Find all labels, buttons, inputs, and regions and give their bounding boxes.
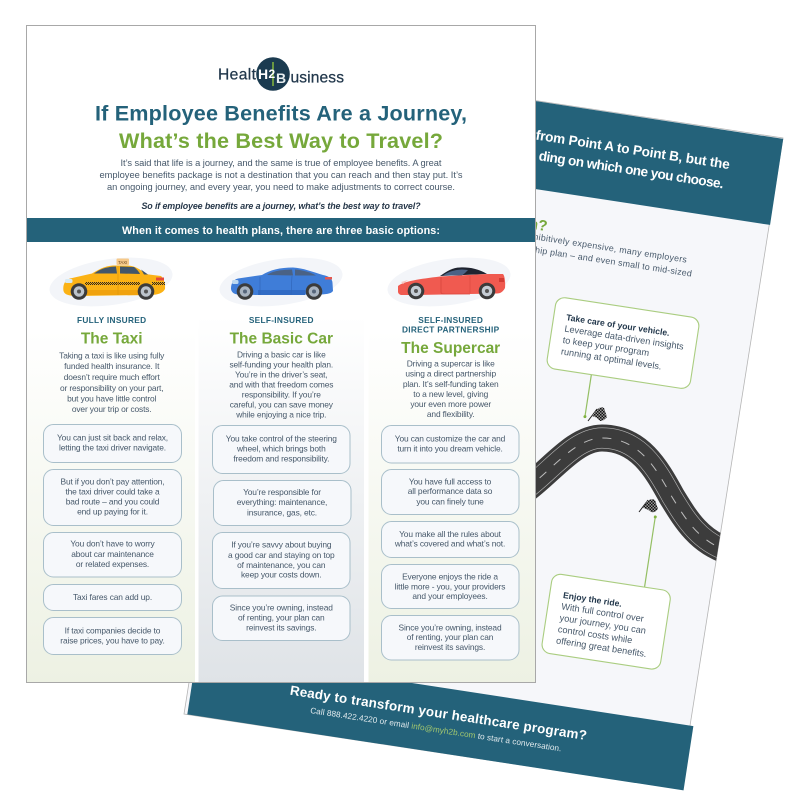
point card: [44, 424, 182, 462]
point card: keep your costs down.: [241, 570, 322, 580]
point card: turn it into you dream vehicle.: [397, 444, 503, 454]
panel: the taxi: [27, 251, 195, 682]
plan label: SELF-INSURED: [418, 315, 483, 325]
point card: a good car and staying on top: [228, 550, 335, 560]
logo: B: [276, 70, 286, 86]
point card: letting the taxi driver navigate.: [59, 443, 166, 453]
plan description: You’re in the driver’s seat,: [235, 370, 328, 380]
intro text: [100, 158, 463, 192]
plan description: plan. It’s self-funding taken: [403, 379, 499, 389]
callout: enjoy the ride: Enjoy the ride.: [562, 590, 623, 609]
plan description: careful, you can save money: [230, 400, 334, 410]
point card: You don’t have to worry: [70, 539, 156, 549]
point card: of renting, your plan can: [407, 632, 494, 642]
callout: take care of your vehicle: running at optimal levels.: [560, 346, 662, 372]
plan name: The Taxi: [81, 330, 143, 348]
logo: Healt: [218, 66, 257, 84]
point card: Taxi fares can add up.: [73, 592, 152, 602]
point card: [44, 532, 182, 577]
point card: Since you’re owning, instead: [230, 602, 333, 612]
title: If Employee Benefits Are a Journey,: [95, 100, 467, 126]
plan description: Taking a taxi is like using fully: [59, 350, 165, 360]
point card: You’re responsible for: [243, 487, 321, 497]
plan name: The Supercar: [401, 340, 500, 357]
intro text: an ongoing journey, and every year, you need to make adjustments to correct course.: [107, 182, 455, 192]
plan description: or responsibility on your part,: [60, 383, 163, 393]
footer contact line: Call 888.422.4220 or email info@myh2b.com to start a conversation.: [310, 706, 562, 753]
point card: freedom and responsibility.: [233, 454, 329, 464]
plan description: over your trip or costs.: [72, 404, 152, 414]
callout: enjoy the ride: [541, 501, 682, 670]
point card: You take control of the steering: [226, 434, 337, 444]
point card: If taxi companies decide to: [65, 625, 161, 635]
section banner: When it comes to health plans, there are three basic options:: [122, 225, 440, 237]
footer heading: Ready to transform your healthcare program?: [289, 683, 588, 743]
plan name: The Basic Car: [230, 330, 333, 348]
point card: You can customize the car and: [395, 434, 506, 444]
logo: 2: [268, 67, 276, 81]
point card: [214, 480, 351, 526]
back section text: hibitively expensive, many employers: [533, 231, 688, 265]
front page sheet: [26, 26, 536, 682]
plan description: doesn’t require much effort: [64, 372, 160, 382]
icon: checkered flag 1: [588, 407, 607, 421]
title: What’s the Best Way to Travel?: [119, 128, 443, 153]
callout: enjoy the ride: your journey, you can: [559, 613, 647, 636]
point card: raise prices, you have to pay.: [60, 636, 165, 646]
point card: all performance data so: [408, 486, 493, 496]
logo: H: [258, 66, 268, 82]
plan label: FULLY INSURED: [77, 315, 146, 325]
plan label: [402, 315, 500, 334]
intro text: It’s said that life is a journey, and the same is true of employee benefits. A great: [120, 158, 442, 168]
icon: blue car: [216, 251, 346, 313]
plan description: and with that freedom comes: [229, 380, 333, 390]
plan label: DIRECT PARTNERSHIP: [402, 324, 500, 334]
back header band: [274, 63, 783, 225]
back section heading: n?: [528, 216, 549, 235]
callout: take care of your vehicle: [539, 296, 700, 433]
plan description: using a direct partnership: [405, 369, 496, 379]
point card: reinvest its savings.: [415, 642, 485, 652]
icon: red car: [384, 251, 514, 313]
intro text: employee benefits package is not a destination that you can reach and then stay put. It’s: [100, 170, 463, 180]
panel: the supercar: [368, 251, 535, 682]
point card: Since you’re owning, instead: [399, 622, 502, 632]
panel: back page: [184, 63, 783, 790]
icon: taxi: TAXI: [118, 260, 127, 265]
point card: [382, 564, 519, 608]
point card: But if you don’t pay attention,: [60, 476, 164, 486]
back footer band: [187, 650, 693, 790]
point card: [44, 470, 182, 526]
back page road: [525, 438, 728, 551]
logo: [218, 57, 344, 91]
point card: of renting, your plan can: [238, 613, 325, 623]
back header text: from Point A to Point B, but the: [535, 128, 731, 172]
icon: checkered flag 2: [639, 499, 658, 512]
callout: take care of your vehicle: to keep your program: [562, 335, 650, 358]
title: [95, 100, 467, 153]
point card: insurance, gas, etc.: [247, 507, 317, 517]
plan description: [59, 350, 165, 414]
point card: everything: maintenance,: [237, 497, 327, 507]
point card: end up paying for it.: [77, 507, 148, 517]
panel: front page: [26, 26, 536, 682]
point card: reinvest its savings.: [246, 622, 316, 632]
plan description: Driving a supercar is like: [407, 359, 495, 369]
point card: little more - you, your providers: [395, 581, 505, 591]
plan description: and flexibility.: [427, 409, 474, 419]
point card: and your employees.: [412, 591, 488, 601]
point card: you can finely tune: [416, 496, 484, 506]
point card: [382, 470, 519, 514]
point card: You make all the rules about: [399, 529, 502, 539]
plan label: SELF-INSURED: [249, 315, 314, 325]
plan description: while enjoying a nice trip.: [235, 410, 326, 420]
back header text: ding on which one you choose.: [538, 148, 725, 191]
point card: [212, 596, 350, 640]
callout: take care of your vehicle: Leverage data-driven insights: [564, 324, 685, 352]
plan description: to a new level, giving: [413, 389, 489, 399]
point card: [382, 426, 519, 463]
callout: enjoy the ride: With full control over: [561, 601, 645, 624]
intro question: So if employee benefits are a journey, what’s the best way to travel?: [142, 201, 421, 211]
callout: take care of your vehicle: Take care of your vehicle.: [566, 312, 670, 338]
plan description: [403, 359, 499, 419]
back page sheet: [184, 63, 783, 789]
point card: Everyone enjoys the ride a: [402, 571, 498, 581]
callout: enjoy the ride: offering great benefits.: [556, 635, 647, 659]
point card: [212, 532, 350, 588]
point card: [382, 616, 519, 660]
point card: of maintenance, you can: [237, 560, 326, 570]
point card: or related expenses.: [76, 559, 149, 569]
plan description: funded health insurance. It: [64, 361, 160, 371]
point card: about car maintenance: [71, 549, 154, 559]
plan description: but you have little control: [67, 394, 157, 404]
point card: what’s covered and what’s not.: [394, 539, 505, 549]
panel: the basic car: [198, 251, 364, 682]
icon: taxi: [46, 251, 176, 313]
point card: bad route – and you could: [66, 497, 160, 507]
plan description: self-funding your health plan.: [229, 360, 333, 370]
point card: wheel, which brings both: [236, 444, 326, 454]
plan description: your even more power: [410, 399, 491, 409]
logo: usiness: [290, 70, 344, 86]
plan description: [229, 350, 334, 420]
section banner: [27, 218, 535, 242]
point card: [382, 522, 519, 558]
point card: You have full access to: [409, 476, 492, 486]
point card: If you’re savvy about buying: [231, 539, 332, 549]
point card: the taxi driver could take a: [65, 487, 160, 497]
point card: [44, 584, 182, 610]
back section text: ship plan – and even small to mid-sized: [530, 244, 693, 279]
callout: enjoy the ride: control costs while: [557, 624, 633, 645]
point card: You can just sit back and relax,: [57, 433, 168, 443]
point card: [44, 618, 182, 654]
plan description: responsibility. If you’re: [242, 390, 321, 400]
plan description: Driving a basic car is like: [237, 350, 326, 360]
point card: [212, 426, 350, 474]
back header text: [532, 128, 731, 192]
